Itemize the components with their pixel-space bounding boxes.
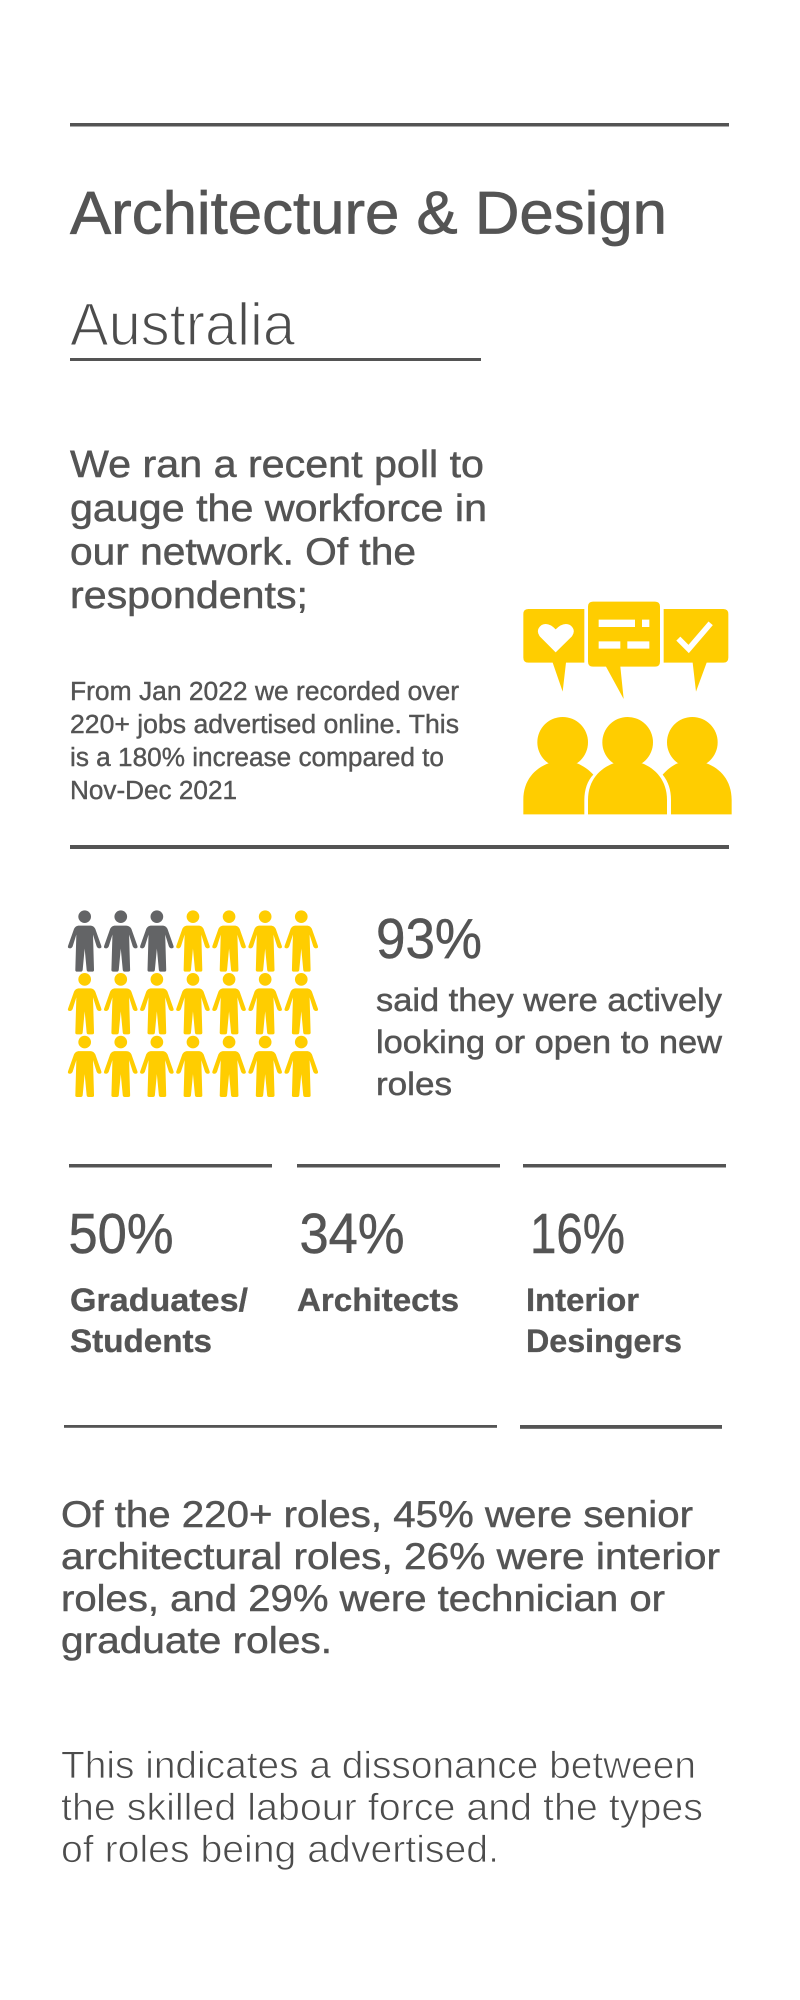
icon: check speech bubble — [664, 609, 728, 692]
pictogram: 93 percent of people — [68, 910, 318, 1097]
intro paragraph: respondents; — [70, 575, 308, 617]
stat description: roles — [376, 1066, 452, 1102]
conclusion paragraph: the skilled labour force and the types — [61, 1787, 703, 1829]
stat column: architects — [297, 1202, 459, 1318]
roles paragraph: Of the 220+ roles, 45% were senior — [61, 1493, 693, 1535]
stat: 93 percent: 93% — [376, 907, 482, 971]
jobs paragraph: From Jan 2022 we recorded over — [70, 678, 460, 706]
intro paragraph: our network. Of the — [70, 532, 416, 574]
conclusion paragraph: of roles being advertised. — [61, 1829, 499, 1871]
conclusion paragraph: This indicates a dissonance between — [61, 1745, 696, 1787]
roles paragraph: architectural roles, 26% were interior — [61, 1535, 720, 1577]
stat description: said they were actively — [376, 982, 722, 1018]
icon: people with speech bubbles — [523, 602, 732, 814]
section rule — [70, 845, 729, 849]
roles paragraph: graduate roles. — [61, 1619, 332, 1661]
stat column: interior designers: Desingers — [526, 1323, 682, 1359]
title: Architecture & Design — [70, 180, 667, 246]
stat column: graduates and students — [68, 1202, 248, 1359]
column rules — [69, 1164, 726, 1168]
intro paragraph — [70, 444, 487, 617]
stat description: looking or open to new — [376, 1024, 723, 1060]
stat column: interior designers: 16% — [530, 1202, 625, 1266]
jobs paragraph: Nov-Dec 2021 — [70, 777, 237, 805]
subtitle: Australia — [70, 291, 296, 358]
intro paragraph: We ran a recent poll to — [70, 444, 484, 486]
stat column: interior designers — [526, 1202, 682, 1359]
lower rules — [64, 1425, 722, 1429]
stat column: graduates and students: 50% — [68, 1202, 174, 1266]
icon: text speech bubble — [588, 602, 660, 699]
stat description — [376, 982, 723, 1102]
stat column: architects: 34% — [300, 1202, 404, 1266]
jobs paragraph — [70, 678, 460, 805]
stat column: graduates and students: Students — [70, 1323, 212, 1359]
subtitle underline — [70, 358, 481, 361]
stat column: architects: Architects — [297, 1282, 459, 1318]
stat column: graduates and students: Graduates/ — [70, 1282, 248, 1318]
stat column: interior designers: Interior — [526, 1282, 639, 1318]
conclusion paragraph — [61, 1745, 703, 1871]
jobs paragraph: is a 180% increase compared to — [70, 744, 444, 772]
top rule — [70, 123, 729, 126]
intro paragraph: gauge the workforce in — [70, 488, 487, 530]
jobs paragraph: 220+ jobs advertised online. This — [70, 711, 459, 739]
icon: heart speech bubble — [523, 609, 584, 692]
roles paragraph — [61, 1493, 720, 1661]
icon: three people — [523, 717, 732, 814]
roles paragraph: roles, and 29% were technician or — [61, 1577, 665, 1619]
